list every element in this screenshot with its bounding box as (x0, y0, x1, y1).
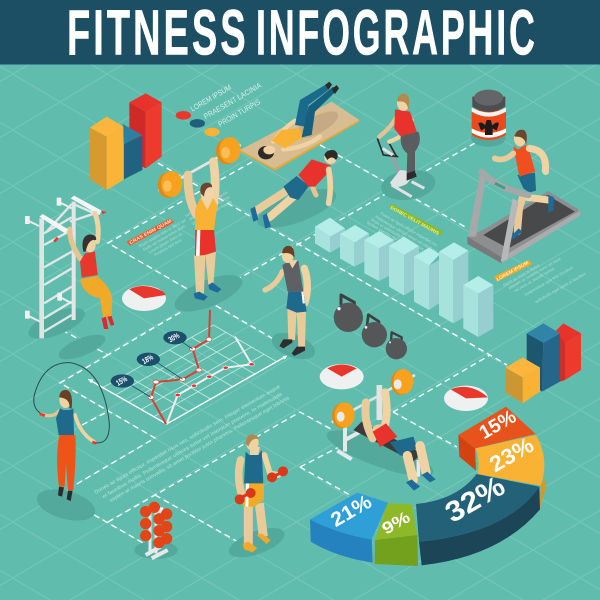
text block: lifter description: ut tempor dui ante magna (190, 198, 233, 226)
segment: 23% (476, 432, 546, 508)
text block: donec description: Fusce ac ligula efficitur imperdiet nec (379, 211, 439, 248)
icon: pie chart white and red (122, 286, 166, 311)
icon: kettlebells (334, 295, 407, 359)
chart callout: 18% (137, 353, 160, 366)
dashed connector lines (60, 143, 507, 543)
segment: 9%: 9% (378, 507, 414, 538)
donut chart: isometric percent segments (310, 406, 546, 566)
figure: man with dumbbells (225, 434, 288, 563)
text block: lifter description: Lorem ipsum dolor sit (147, 231, 184, 255)
title (67, 0, 538, 69)
text block: lorem description: vel nunc at, blandit lacinia (513, 266, 556, 293)
text block: lifter description: dapibus at mollis sed eros (188, 194, 230, 222)
text block: lorem description: Morbi eu nunc at metus (502, 262, 541, 288)
figure: man on treadmill (467, 130, 580, 263)
header band (0, 0, 600, 64)
segment: 23%: 23% (485, 432, 538, 477)
line chart (88, 310, 287, 424)
legend: LOREM IPSUM (189, 83, 233, 113)
legend (176, 80, 264, 136)
text block: lifter description: Etiam sagittis nibh et dolor vel (138, 218, 186, 248)
figure: man standing with tank top (265, 246, 319, 364)
segment: 9% (375, 503, 418, 566)
upper-right labels and cubes (315, 204, 587, 337)
figure: weightlifter (158, 137, 247, 319)
text block: lorem description: Suspendisse quis felis tincidunt (523, 264, 575, 297)
text block: lorem description: sollicitudin eget ligula in faucibus (534, 271, 587, 304)
chart callout: 18%: 18% (140, 353, 155, 366)
figure: man doing push-ups (250, 150, 341, 236)
upper-left zone (90, 80, 264, 311)
segment: 21% (310, 491, 388, 563)
segment: 32%: 32% (440, 470, 511, 529)
text block: centre paragraph: et faucibus mollis. Pellentesque ultrices tortor vel interdum posuere. In malesuada (101, 391, 284, 500)
text block: donec description: Nullam egestas dui nec lacus pulvinar (366, 220, 427, 258)
figure: man on bench press (322, 369, 438, 491)
icon: pie chart upper (320, 364, 364, 389)
text block: lifter description (136, 190, 237, 261)
icon: dumbbell rack (134, 502, 178, 559)
figure: woman on wall bars (25, 196, 114, 364)
figure: woman on exercise bike (377, 93, 437, 203)
icon: pie chart right (444, 386, 488, 411)
segment: 21%: 21% (327, 491, 376, 532)
figure: woman with jump rope (33, 363, 109, 526)
chart callout: 15% (111, 374, 134, 388)
segment: 15% (458, 406, 536, 471)
lower-right zone (310, 323, 581, 566)
bar chart: isometric pale cubes (315, 218, 493, 337)
text block: centre paragraph: sapien at mauris convallis, sit amet porttitor justo pharetra. Pellentesque eget lobortis (109, 395, 291, 504)
text block: lifter description: Nulla vel massa tellus enim (142, 223, 187, 252)
text block: donec description: Proin et sollicitudin libero, sit amet porta (370, 217, 434, 257)
text block: lorem description (502, 256, 587, 304)
label: lorem ipsum: LOREM IPSUM (495, 260, 529, 282)
segment: 32% (416, 470, 540, 565)
chart callout: 30% (163, 331, 187, 344)
segment: 15%: 15% (476, 406, 520, 444)
legend: PROIN TURPIS (216, 97, 262, 129)
label: donec velit mauris: DONEC VELIT MAURIS (390, 205, 440, 236)
text block: donec description: Pellentesque ultrices tortor vel interdum (374, 214, 438, 254)
bar chart: lower right (506, 323, 581, 403)
text block: lifter description: Vivamus sed arcu (153, 237, 183, 257)
text block: lorem description: aliquam ac sodales nunc vel risus (507, 256, 561, 290)
chart callout: 15%: 15% (114, 374, 129, 388)
text block: lifter description: nunc fermentum eget lacus (184, 190, 228, 218)
bar chart: yellow blue red (90, 93, 162, 190)
text block: centre paragraph: Donec ac ligula efficitur, imperdiet risus nec, sollicitudin sem. Integer elementum augue (94, 384, 282, 496)
legend: PRAESENT LACINIA (202, 80, 264, 121)
lying man on mat (240, 82, 359, 171)
label: cras enim quam: CRAS ENIM QUAM (128, 218, 173, 245)
lower-left zone (33, 310, 291, 563)
icon: supplement jar (471, 90, 506, 147)
chart callout: 30%: 30% (167, 331, 181, 344)
